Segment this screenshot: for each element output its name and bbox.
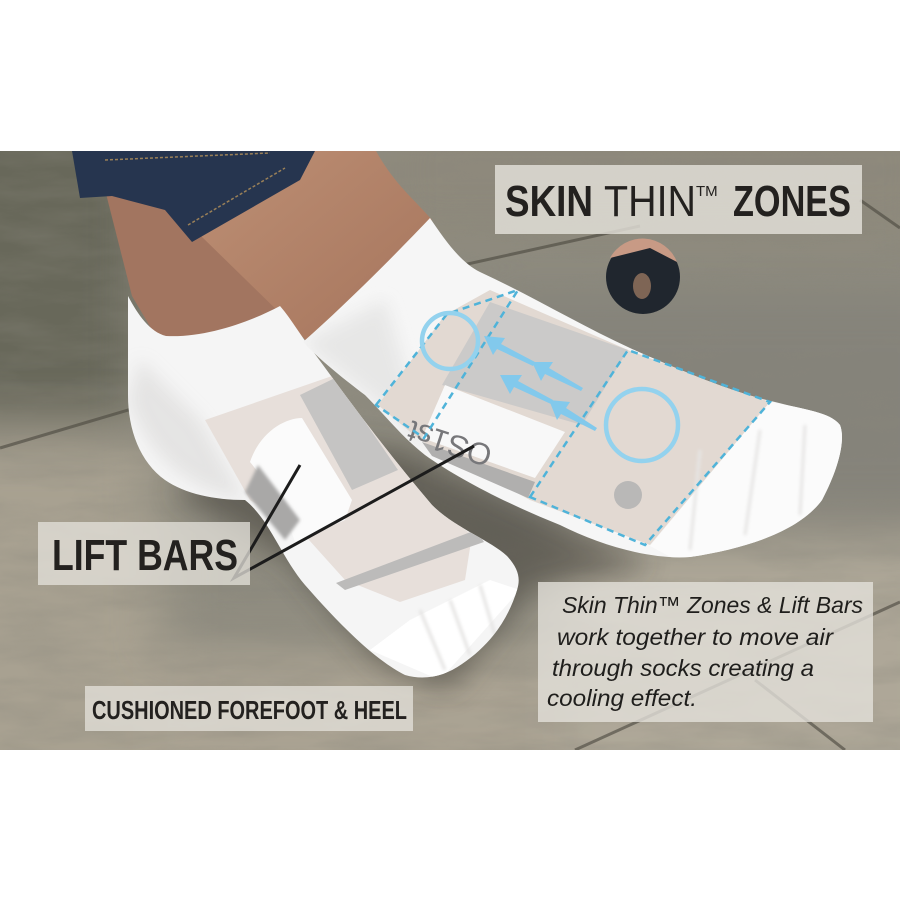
legs bbox=[106, 196, 275, 336]
airflow circles bbox=[422, 313, 678, 461]
panel: right sock bbox=[295, 210, 855, 570]
skin thin zones dashed outlines bbox=[376, 290, 770, 545]
explanation text block: work together to move air bbox=[557, 624, 834, 650]
skin thin zones label: TM bbox=[696, 183, 718, 200]
skin thin zones label: ZONES bbox=[733, 177, 851, 226]
cushioned label bbox=[85, 686, 413, 731]
lift bars label bbox=[38, 522, 250, 585]
airflow arrows bbox=[484, 336, 597, 431]
cushioned label: CUSHIONED FOREFOOT & HEEL bbox=[92, 695, 407, 725]
explanation text block: cooling effect. bbox=[547, 685, 697, 711]
lift bar pointer lines bbox=[234, 446, 474, 578]
explanation text block bbox=[538, 582, 873, 722]
skin thin zones label bbox=[495, 165, 862, 234]
panel: left sock bbox=[120, 290, 530, 690]
photo background: stone floor bbox=[0, 151, 900, 750]
explanation text block: through socks creating a bbox=[552, 655, 814, 681]
icon: skin thin zone detail bbox=[606, 239, 680, 314]
skin thin zones label: THIN bbox=[604, 177, 696, 226]
explanation text block: Skin Thin™ Zones & Lift Bars bbox=[562, 592, 863, 618]
skin thin zones label: SKIN bbox=[505, 177, 593, 226]
infographic bbox=[0, 151, 900, 750]
lift bars label: LIFT BARS bbox=[52, 531, 238, 580]
jeans bbox=[72, 151, 315, 242]
sock logo: OS1st bbox=[403, 414, 496, 474]
sock shadows bbox=[170, 440, 650, 690]
